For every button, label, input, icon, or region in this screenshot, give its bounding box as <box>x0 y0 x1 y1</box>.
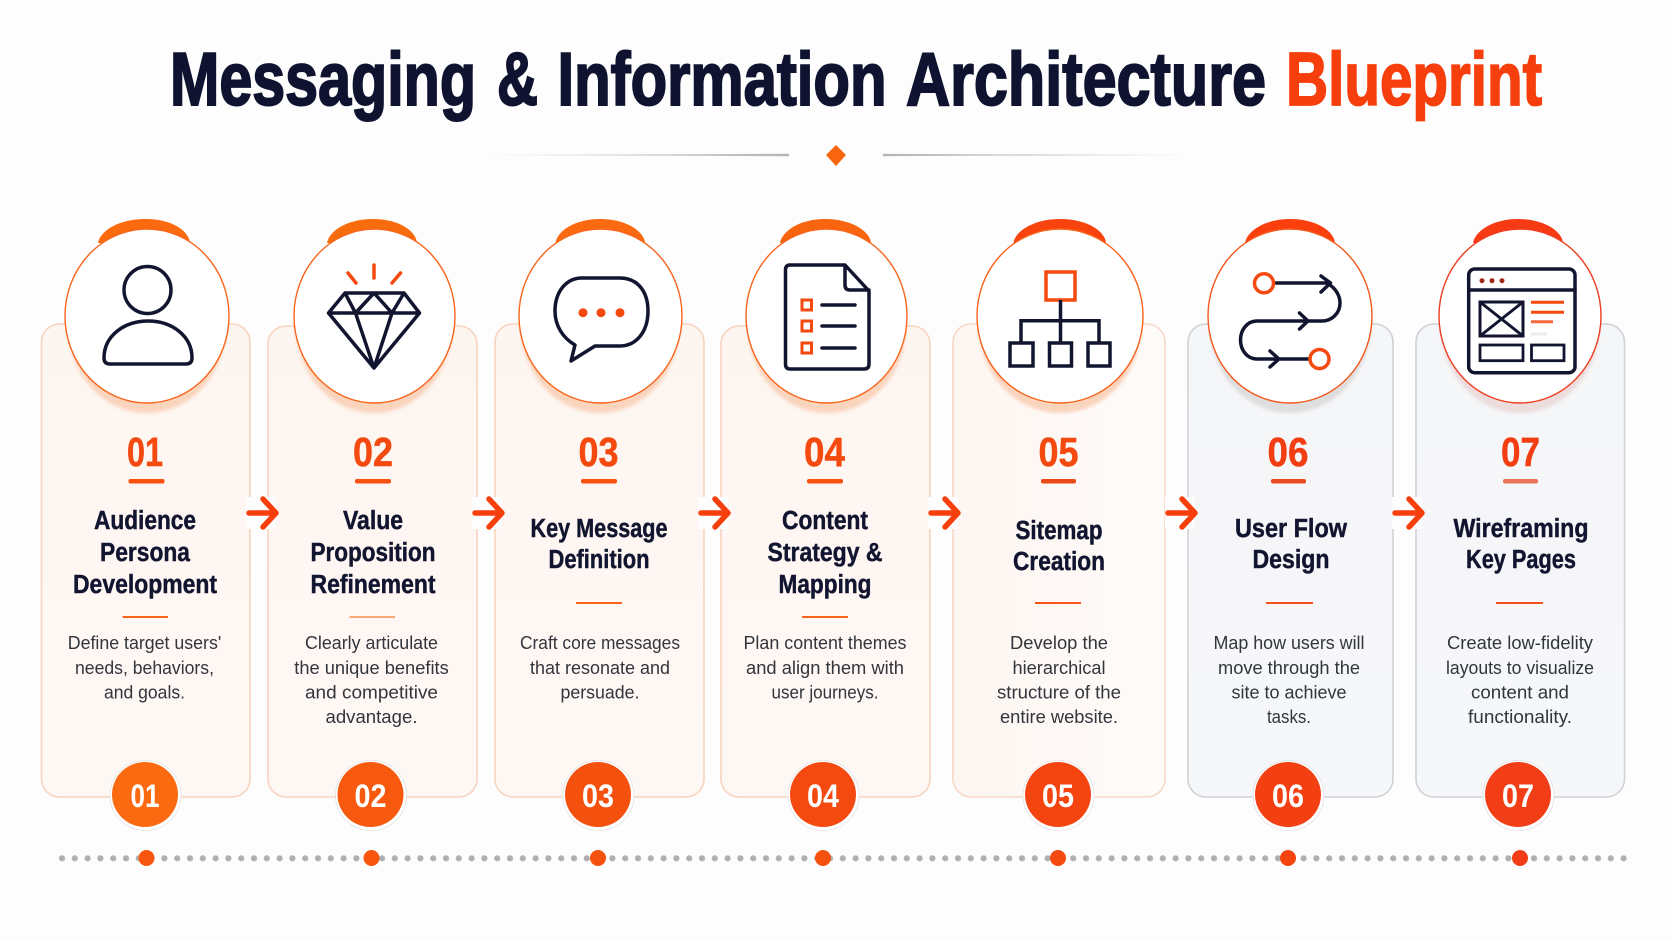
card background <box>42 324 250 797</box>
step title: Key Pages <box>1466 546 1576 574</box>
step title: Strategy & <box>768 539 882 567</box>
number badge <box>110 760 181 830</box>
step title: Creation <box>1013 548 1105 576</box>
step title: Audience <box>94 507 196 535</box>
description: and align them with <box>746 657 904 678</box>
card background <box>268 326 477 797</box>
description: structure of the <box>997 682 1121 702</box>
arrow: step 3 to 4 <box>698 497 728 529</box>
icon: wireframe in circle <box>1439 219 1601 413</box>
icon: person in circle <box>65 219 229 413</box>
number badge <box>563 760 634 830</box>
panel: step 2 <box>268 219 477 830</box>
arrow: step 5 to 6 <box>1165 497 1195 529</box>
step title: Key Message <box>530 515 668 543</box>
description <box>744 632 906 702</box>
step number: 04 <box>804 429 845 475</box>
title <box>170 37 1542 121</box>
card background <box>1188 324 1393 797</box>
title: Messaging <box>170 37 476 121</box>
description: hierarchical <box>1012 657 1106 678</box>
step title <box>1235 515 1347 574</box>
number badge: 06 <box>1272 778 1304 814</box>
separator <box>122 616 168 618</box>
description: Develop the <box>1010 632 1108 653</box>
description: functionality. <box>1468 706 1572 727</box>
description <box>294 632 449 727</box>
separator <box>350 616 395 618</box>
step number: 07 <box>1501 429 1540 475</box>
step title: Refinement <box>310 571 436 599</box>
number underline <box>581 479 617 484</box>
description: Plan content themes <box>744 632 906 653</box>
number underline <box>1041 479 1076 484</box>
separator <box>802 616 848 618</box>
description: needs, behaviors, <box>75 657 214 678</box>
arrow: step 1 to 2 <box>246 497 276 529</box>
step number: 03 <box>578 429 618 475</box>
step title: Persona <box>100 539 191 567</box>
step number: 06 <box>1268 429 1308 475</box>
description: site to achieve <box>1232 682 1346 702</box>
step number: 05 <box>1038 429 1078 475</box>
step title <box>530 515 668 574</box>
number badge: 01 <box>130 778 160 814</box>
step title <box>1454 515 1588 574</box>
description: Create low-fidelity <box>1447 632 1594 653</box>
title: Architecture <box>906 37 1266 121</box>
step title: Proposition <box>310 539 436 567</box>
panel: step 4 <box>721 219 930 830</box>
number underline <box>1271 479 1306 484</box>
description <box>1214 632 1364 727</box>
description: Clearly articulate <box>305 632 438 653</box>
number badge <box>1483 760 1554 830</box>
card background <box>721 326 930 797</box>
description: content and <box>1471 682 1569 702</box>
icon: document checklist in circle <box>746 219 907 413</box>
description: move through the <box>1218 657 1360 678</box>
description: and goals. <box>104 682 185 702</box>
step title: Development <box>73 571 217 599</box>
step number: 02 <box>353 429 393 475</box>
description <box>520 632 680 702</box>
description: persuade. <box>560 682 640 702</box>
description: the unique benefits <box>294 657 449 678</box>
title: & <box>497 37 538 121</box>
number badge <box>788 760 859 830</box>
separator <box>1035 602 1081 604</box>
number badge: 04 <box>807 778 839 814</box>
step title: Sitemap <box>1016 517 1102 545</box>
separator <box>1266 602 1313 604</box>
dotted progress timeline <box>62 850 1626 866</box>
arrow: step 2 to 3 <box>472 497 502 529</box>
arrow: step 4 to 5 <box>928 497 958 529</box>
step title <box>768 507 882 599</box>
step title <box>310 507 436 599</box>
description: Craft core messages <box>520 632 680 653</box>
number badge <box>1253 760 1324 830</box>
separator <box>1496 602 1543 604</box>
number badge: 02 <box>354 778 386 814</box>
step title: Wireframing <box>1454 515 1588 543</box>
step title: Mapping <box>778 571 872 599</box>
title: Blueprint <box>1286 37 1542 121</box>
title: Information <box>558 37 886 121</box>
step number: 01 <box>127 429 163 475</box>
number underline <box>807 479 843 484</box>
title divider with diamond <box>478 145 1195 166</box>
icon: diamond in circle <box>294 219 455 413</box>
number underline <box>128 479 164 484</box>
icon: speech bubble in circle <box>519 219 682 413</box>
step title <box>1013 517 1105 576</box>
description <box>68 632 221 702</box>
arrow: step 6 to 7 <box>1392 497 1422 529</box>
description: Define target users' <box>68 632 221 653</box>
description: layouts to visualize <box>1446 657 1594 678</box>
number badge: 03 <box>582 778 614 814</box>
description: and competitive <box>305 682 438 702</box>
description: Map how users will <box>1214 632 1364 653</box>
card background <box>1416 324 1624 797</box>
panel: step 3 <box>495 219 704 830</box>
step title <box>73 507 217 599</box>
step title: User Flow <box>1235 515 1347 543</box>
card background <box>495 324 704 797</box>
description <box>997 632 1121 727</box>
number underline <box>1503 479 1538 484</box>
icon: sitemap in circle <box>977 219 1143 413</box>
number badge: 05 <box>1042 778 1074 814</box>
description: entire website. <box>1000 706 1118 727</box>
step title: Definition <box>548 546 650 574</box>
step title: Content <box>782 507 868 535</box>
description: advantage. <box>326 706 418 727</box>
panel: step 7 <box>1416 219 1624 830</box>
panel: step 5 <box>953 219 1165 830</box>
icon: user flow in circle <box>1208 219 1372 413</box>
panel: step 6 <box>1188 219 1393 830</box>
card background <box>953 324 1165 797</box>
separator <box>576 602 622 604</box>
description: that resonate and <box>530 657 670 678</box>
number underline <box>355 479 391 484</box>
number badge: 07 <box>1502 778 1534 814</box>
number badge <box>336 760 406 830</box>
description: tasks. <box>1267 706 1311 727</box>
step title: Design <box>1252 546 1330 574</box>
description <box>1446 632 1594 727</box>
number badge <box>1023 760 1094 830</box>
panel: step 1 <box>42 219 250 830</box>
description: user journeys. <box>772 682 878 702</box>
step title: Value <box>343 507 403 535</box>
